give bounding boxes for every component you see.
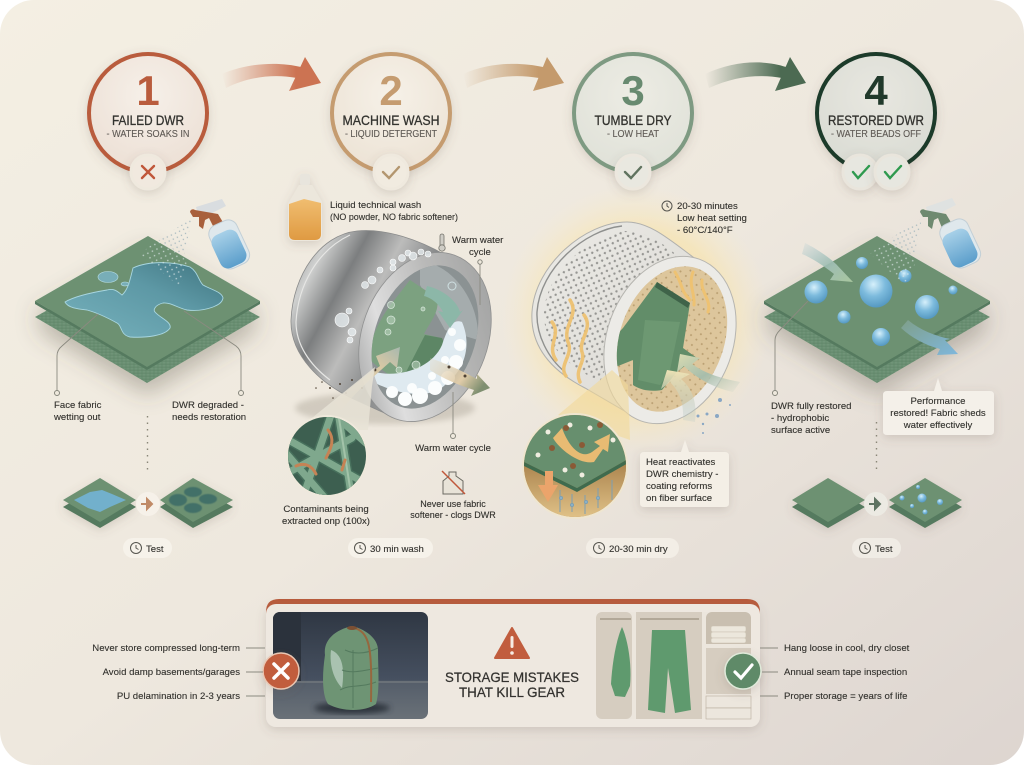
pill: test time: Test: [146, 544, 164, 555]
folded towels: [711, 626, 746, 643]
step 2 badge: machine wash: [332, 54, 450, 189]
callout: heat reactivates: Heat reactivates: [646, 457, 716, 468]
magnified coating lens: [520, 410, 630, 520]
icon: warning triangle: [495, 628, 529, 658]
storage good practice list: Hang loose in cool, dry closet: [784, 643, 910, 654]
panel heading: THAT KILL GEAR: [459, 684, 565, 700]
back rim line: [296, 235, 350, 380]
label: liquid technical wash: Liquid technical wash: [330, 200, 421, 211]
leader line: DWR restored: [775, 301, 808, 392]
image: closet with hanging gear: [596, 612, 751, 719]
step 4 subtitle: - WATER BEADS OFF: [831, 129, 921, 140]
icon: arrow circle: [864, 492, 888, 516]
label: drying settings: Low heat setting: [677, 213, 747, 224]
callout: performance restored: [883, 378, 994, 435]
step 1 badge: failed DWR: [89, 54, 207, 189]
leader end dot: [772, 390, 778, 396]
magnifier cone: [558, 370, 630, 440]
step 3 badge: tumble dry: [574, 54, 692, 189]
magnified fibers lens: [288, 415, 366, 495]
hanging trousers: [648, 630, 691, 713]
foam on rim: [335, 249, 431, 343]
label: contaminants: Contaminants being: [283, 504, 369, 515]
storage mistakes list: [92, 643, 265, 702]
step 2 number: 2: [379, 67, 403, 114]
label: warm water cycle top: cycle: [469, 247, 491, 258]
panel body: [266, 604, 760, 727]
leader end dots: [54, 390, 244, 396]
step 3 title: TUMBLE DRY: [594, 113, 672, 128]
label: DWR degraded: needs restoration: [172, 412, 246, 423]
label: warm water lower: Warm water cycle: [415, 443, 491, 454]
dotted arrow down: [876, 422, 878, 474]
callout: heat reactivates: DWR chemistry -: [646, 469, 718, 480]
hanging jacket: [611, 627, 631, 697]
heat waves: [552, 300, 587, 382]
test swatch: beaded: [889, 478, 962, 528]
pill: wash time: [348, 538, 433, 558]
back rim line: [537, 226, 622, 372]
dotted arrow down: [146, 416, 148, 470]
arrow off fabric: [901, 320, 958, 355]
icon: thermometer: [439, 234, 445, 251]
pill: dry time: 20-30 min dry: [609, 544, 668, 555]
test swatch: soaked: [160, 478, 233, 528]
label: contaminants: extracted onp (100x): [282, 516, 370, 527]
step 1 subtitle: - WATER SOAKS IN: [106, 129, 190, 140]
step 2 subtitle: - LIQUID DETERGENT: [345, 129, 437, 140]
callout: performance restored: restored! Fabric sheds: [890, 408, 986, 419]
label: drying settings: 20-30 minutes: [677, 201, 738, 212]
callout: performance restored: water effectively: [903, 420, 973, 431]
spray mist: [140, 218, 192, 287]
pill: test time: Test: [875, 544, 893, 555]
flow arrow 1 to 2: [222, 57, 321, 91]
storage good practice list: [760, 643, 910, 702]
callout: heat reactivates: [640, 440, 729, 507]
contaminant specks: [315, 366, 466, 399]
perforations: [544, 231, 680, 382]
drum steel body: [291, 231, 447, 420]
step 4 badge: restored DWR: [817, 54, 935, 189]
arrow down in drum: [424, 286, 463, 328]
heat glow: [501, 185, 771, 455]
drum front rim: [336, 234, 514, 440]
bubbles on garment: [385, 302, 425, 373]
storage mistakes list: PU delamination in 2-3 years: [117, 691, 240, 702]
arrow into fabric: [802, 243, 853, 282]
icon: spray bottle blue: [190, 199, 253, 272]
label: DWR fully restored: surface active: [771, 425, 830, 436]
storage good practice list: Annual seam tape inspection: [784, 667, 907, 678]
storage panel: [263, 599, 761, 727]
label: face fabric: wetting out: [53, 412, 101, 423]
flow arrow 3 to 4: [705, 57, 806, 91]
pill: dry time: [586, 538, 679, 558]
test swatch: plain: [792, 478, 865, 528]
leader top dot: [478, 260, 482, 264]
contaminant flow arrow: [430, 358, 490, 396]
panel top strip: [266, 599, 760, 620]
step 2 title: MACHINE WASH: [342, 113, 440, 128]
dryer drum: [531, 222, 740, 434]
water puddle: [65, 263, 223, 337]
label: DWR fully restored: - hydrophobic: [771, 413, 829, 424]
rising arrow right: [677, 354, 740, 392]
icon: cross badge: [263, 653, 299, 689]
test swatch: wet: [63, 478, 136, 528]
pill: wash time: 30 min wash: [370, 544, 424, 555]
spray mist: [870, 218, 922, 285]
pill: test time: [123, 538, 172, 558]
callout: performance restored: Performance: [911, 396, 965, 407]
label: warm water cycle top: Warm water: [452, 235, 504, 246]
storage mistakes list: Never store compressed long-term: [92, 643, 240, 654]
icon: check: [616, 155, 650, 189]
label: drying settings: - 60°C/140°F: [677, 225, 733, 236]
inner back highlight: [420, 262, 478, 340]
leader line: warm water top: [479, 264, 481, 305]
callout: heat reactivates: coating reforms: [646, 481, 712, 492]
callout: heat reactivates: on fiber surface: [646, 493, 712, 504]
flow arrow 2 to 3: [463, 57, 564, 91]
foam: [370, 321, 467, 394]
image: compressed bag in damp room: [273, 612, 428, 719]
garment in drum: [372, 280, 438, 374]
step 1 title: FAILED DWR: [112, 113, 184, 128]
magnifier cone: [297, 367, 375, 430]
step 4 title: RESTORED DWR: [828, 113, 924, 128]
storage mistakes list: Avoid damp basements/garages: [103, 667, 240, 678]
storage good practice list: Proper storage = years of life: [784, 691, 907, 702]
leader line: warm water lower: [452, 392, 454, 434]
icon: cross: [131, 155, 165, 189]
icon: check badge: [725, 653, 761, 689]
dryer rim: [581, 238, 759, 442]
label: never use softener: Never use fabric: [420, 499, 486, 509]
step 3 number: 3: [621, 67, 645, 114]
icon: check: [374, 155, 408, 189]
fabric swatch: restored: [764, 236, 990, 383]
icon: double check: [843, 155, 909, 189]
step 4 number: 4: [864, 67, 888, 114]
trousers in dryer: [613, 282, 697, 391]
arrow in drum: [327, 347, 400, 410]
dryer body: [532, 222, 697, 420]
panel heading: STORAGE MISTAKES: [445, 669, 579, 685]
step 3 subtitle: - LOW HEAT: [607, 129, 659, 140]
drum opening: [353, 250, 497, 424]
pill: test time: [852, 538, 901, 558]
leader end dot: [450, 434, 456, 438]
label: liquid technical wash: (NO powder, NO fabric softener): [330, 212, 458, 222]
fabric swatch: failed, wetting out: [35, 236, 260, 383]
label: never use softener: softener - clogs DWR: [410, 510, 496, 520]
step 1 number: 1: [136, 67, 160, 114]
label: DWR degraded: DWR degraded -: [172, 400, 244, 411]
bottle of liquid wash: [288, 174, 322, 241]
small water drops: [98, 272, 129, 286]
water vapor dots: [696, 398, 731, 434]
washer drum: [290, 230, 492, 426]
rising arrow: [661, 370, 696, 422]
icon: arrow circle: [136, 492, 160, 516]
leader line: face fabric: [57, 314, 98, 392]
label: face fabric: Face fabric: [54, 400, 102, 411]
drum shadow: [295, 392, 475, 424]
dryer interior: [597, 251, 747, 427]
icon: spray bottle green: [920, 198, 984, 271]
leader line: DWR degraded: [184, 311, 241, 392]
icon: clock: [662, 201, 672, 211]
label: DWR fully restored: DWR fully restored: [771, 401, 852, 412]
icon: no softener: [442, 471, 465, 494]
water beads: [804, 257, 958, 346]
